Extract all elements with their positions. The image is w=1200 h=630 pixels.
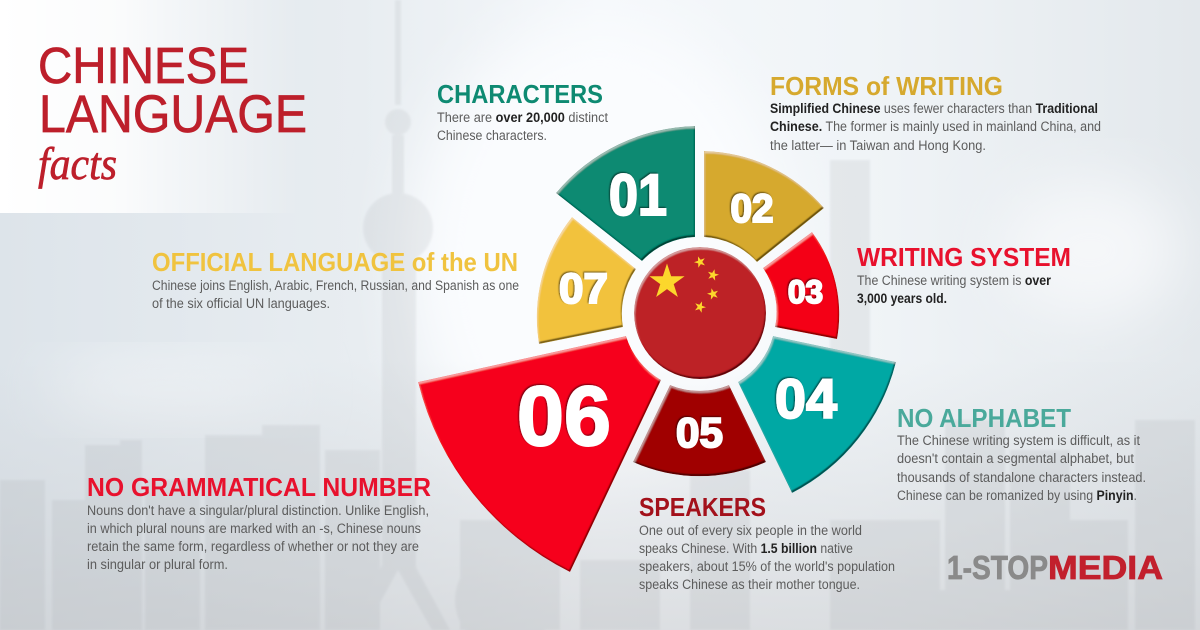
segment 05: 05 <box>676 409 723 456</box>
text block: no grammatical number <box>87 472 431 572</box>
text block: no alphabet: The Chinese writing system is difficult, as it <box>897 433 1140 448</box>
text block: no grammatical number: retain the same form, regardless of whether or not they are <box>87 539 419 554</box>
text block: forms of writing: FORMS of WRITING <box>770 71 1003 101</box>
text block: no alphabet: thousands of standalone characters instead. <box>897 470 1146 485</box>
text block: no grammatical number: NO GRAMMATICAL NUMBER <box>87 472 431 502</box>
segment 03 <box>763 232 839 339</box>
segment 01 <box>556 126 695 261</box>
icon: Chinese flag circle <box>634 247 766 379</box>
title: LANGUAGE <box>39 85 307 144</box>
text block: speakers: speakers, about 15% of the world's population <box>639 559 895 574</box>
text block: forms of writing <box>770 71 1101 153</box>
text block: no grammatical number: in which plural nouns are marked with an -s, Chinese nouns <box>87 521 421 536</box>
text block: forms of writing: Chinese. The former is mainly used in mainland China, and <box>770 119 1101 134</box>
text block: writing system: WRITING SYSTEM <box>857 242 1071 272</box>
title <box>38 37 307 189</box>
logo: 1-STOP MEDIA: 1-STOP <box>947 549 1048 586</box>
segment 02 <box>704 151 824 262</box>
text block: official language of the UN: of the six official UN languages. <box>152 296 330 311</box>
text block: no alphabet: NO ALPHABET <box>897 403 1071 433</box>
text block: speakers <box>639 492 895 592</box>
segment 07 <box>537 217 636 344</box>
wheel chart of numbered segments <box>418 126 896 572</box>
text block: no alphabet <box>897 403 1146 503</box>
segment 06: 06 <box>517 369 611 463</box>
text block: speakers: SPEAKERS <box>639 492 766 522</box>
text block: speakers: One out of every six people in the world <box>639 523 862 538</box>
segment 04 <box>738 336 896 493</box>
text block: official language of the UN: Chinese joins English, Arabic, French, Russian, and Spanish as one <box>152 278 519 293</box>
text block: speakers: speaks Chinese as their mother tongue. <box>639 577 860 592</box>
text block: official language of the UN: OFFICIAL LANGUAGE of the UN <box>152 247 518 277</box>
text block: characters: CHARACTERS <box>437 79 603 109</box>
text block: writing system <box>857 242 1071 306</box>
segment 05 <box>633 385 766 476</box>
text block: forms of writing: the latter— in Taiwan and Hong Kong. <box>770 138 986 153</box>
text block: no alphabet: doesn't contain a segmental alphabet, but <box>897 451 1134 466</box>
text block: characters <box>437 79 608 143</box>
text block: no alphabet: Chinese can be romanized by using Pinyin. <box>897 488 1137 503</box>
segment 07: 07 <box>559 265 608 313</box>
title: facts <box>38 138 117 189</box>
logo: 1-STOP MEDIA: MEDIA <box>1048 549 1163 586</box>
text block: characters: There are over 20,000 distinct <box>437 110 608 125</box>
segment 03: 03 <box>788 274 823 310</box>
text block: no grammatical number: Nouns don't have a singular/plural distinction. Unlike English, <box>87 503 429 518</box>
segment 06 <box>418 336 661 572</box>
white title panel <box>0 0 300 213</box>
segment 04: 04 <box>775 367 837 430</box>
text block: forms of writing: Simplified Chinese uses fewer characters than Traditional <box>770 101 1098 116</box>
text block: writing system: 3,000 years old. <box>857 291 947 306</box>
text block: characters: Chinese characters. <box>437 128 547 143</box>
text block: speakers: speaks Chinese. With 1.5 billion native <box>639 541 853 556</box>
segment 02: 02 <box>730 187 774 231</box>
segment 01: 01 <box>609 163 667 228</box>
text block: writing system: The Chinese writing system is over <box>857 273 1052 288</box>
logo: 1-STOP MEDIA <box>947 549 1163 586</box>
text block: no grammatical number: in singular or plural form. <box>87 557 228 572</box>
text block: official language of the UN <box>152 247 519 311</box>
title: CHINESE <box>38 37 249 94</box>
